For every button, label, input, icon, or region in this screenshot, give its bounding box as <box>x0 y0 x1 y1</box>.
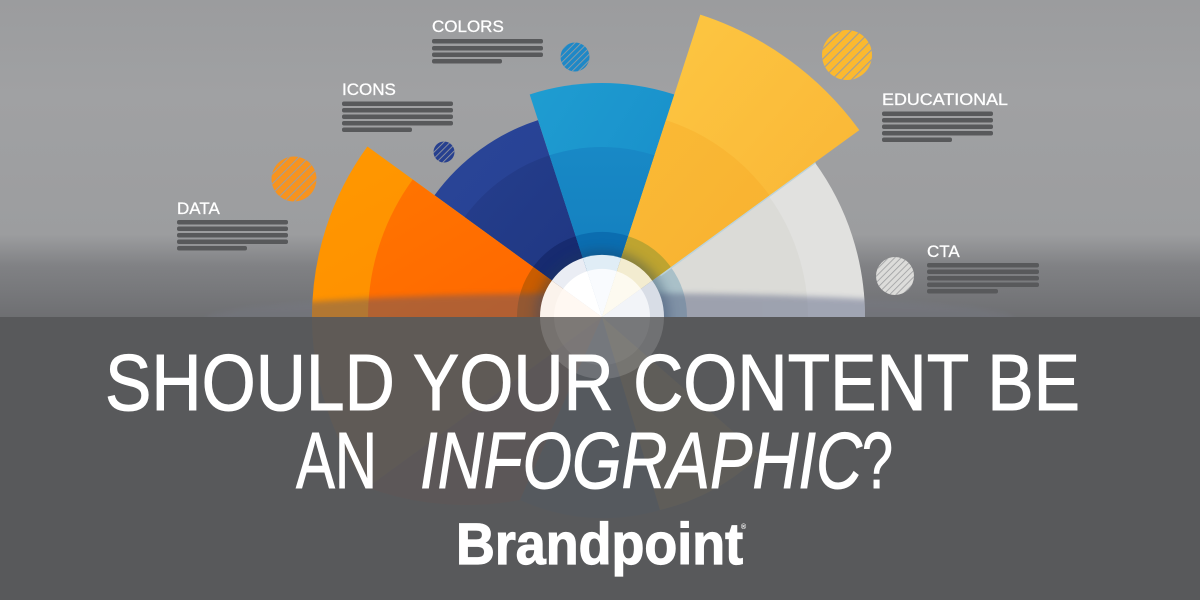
icon: yellow hatched dot <box>822 30 872 80</box>
icon: orange hatched dot <box>272 156 316 202</box>
title: ? <box>862 416 893 505</box>
background <box>0 0 1200 317</box>
label: icons <box>342 80 453 132</box>
label: data <box>177 199 288 250</box>
label: colors: COLORS <box>432 17 504 36</box>
icon: blue hatched dot <box>560 42 590 72</box>
title: AN <box>296 416 377 505</box>
title <box>105 338 1080 505</box>
label: cta <box>927 242 1039 294</box>
title: INFOGRAPHIC <box>420 416 863 505</box>
logo: Brandpoint: Brandpoint <box>456 512 743 577</box>
icon: grey hatched dot <box>876 257 914 295</box>
fan reflection in band <box>312 317 760 518</box>
hub shadow <box>530 246 672 317</box>
title: SHOULD YOUR CONTENT BE <box>105 338 1080 427</box>
label: data: DATA <box>177 199 220 218</box>
segment: colors blue <box>530 83 674 258</box>
label: colors <box>432 17 543 64</box>
segment: data orange <box>312 146 563 317</box>
logo: Brandpoint: ® <box>741 523 747 531</box>
faint horizon glow <box>205 293 1015 347</box>
segment: CTA white <box>652 162 865 317</box>
label: cta: CTA <box>927 242 960 261</box>
label: educational: EDUCATIONAL <box>882 90 1008 109</box>
label: educational <box>882 90 1008 142</box>
hub disk reflection <box>540 317 664 379</box>
label: icons: ICONS <box>342 80 396 99</box>
horizon shadow ellipse <box>312 290 865 317</box>
fan chart <box>312 14 914 317</box>
segment: icons navy <box>434 120 582 280</box>
icon: navy hatched dot <box>434 142 454 162</box>
segment: educational yellow <box>617 14 860 288</box>
bottom band <box>0 317 1200 600</box>
hub disk <box>540 255 664 317</box>
